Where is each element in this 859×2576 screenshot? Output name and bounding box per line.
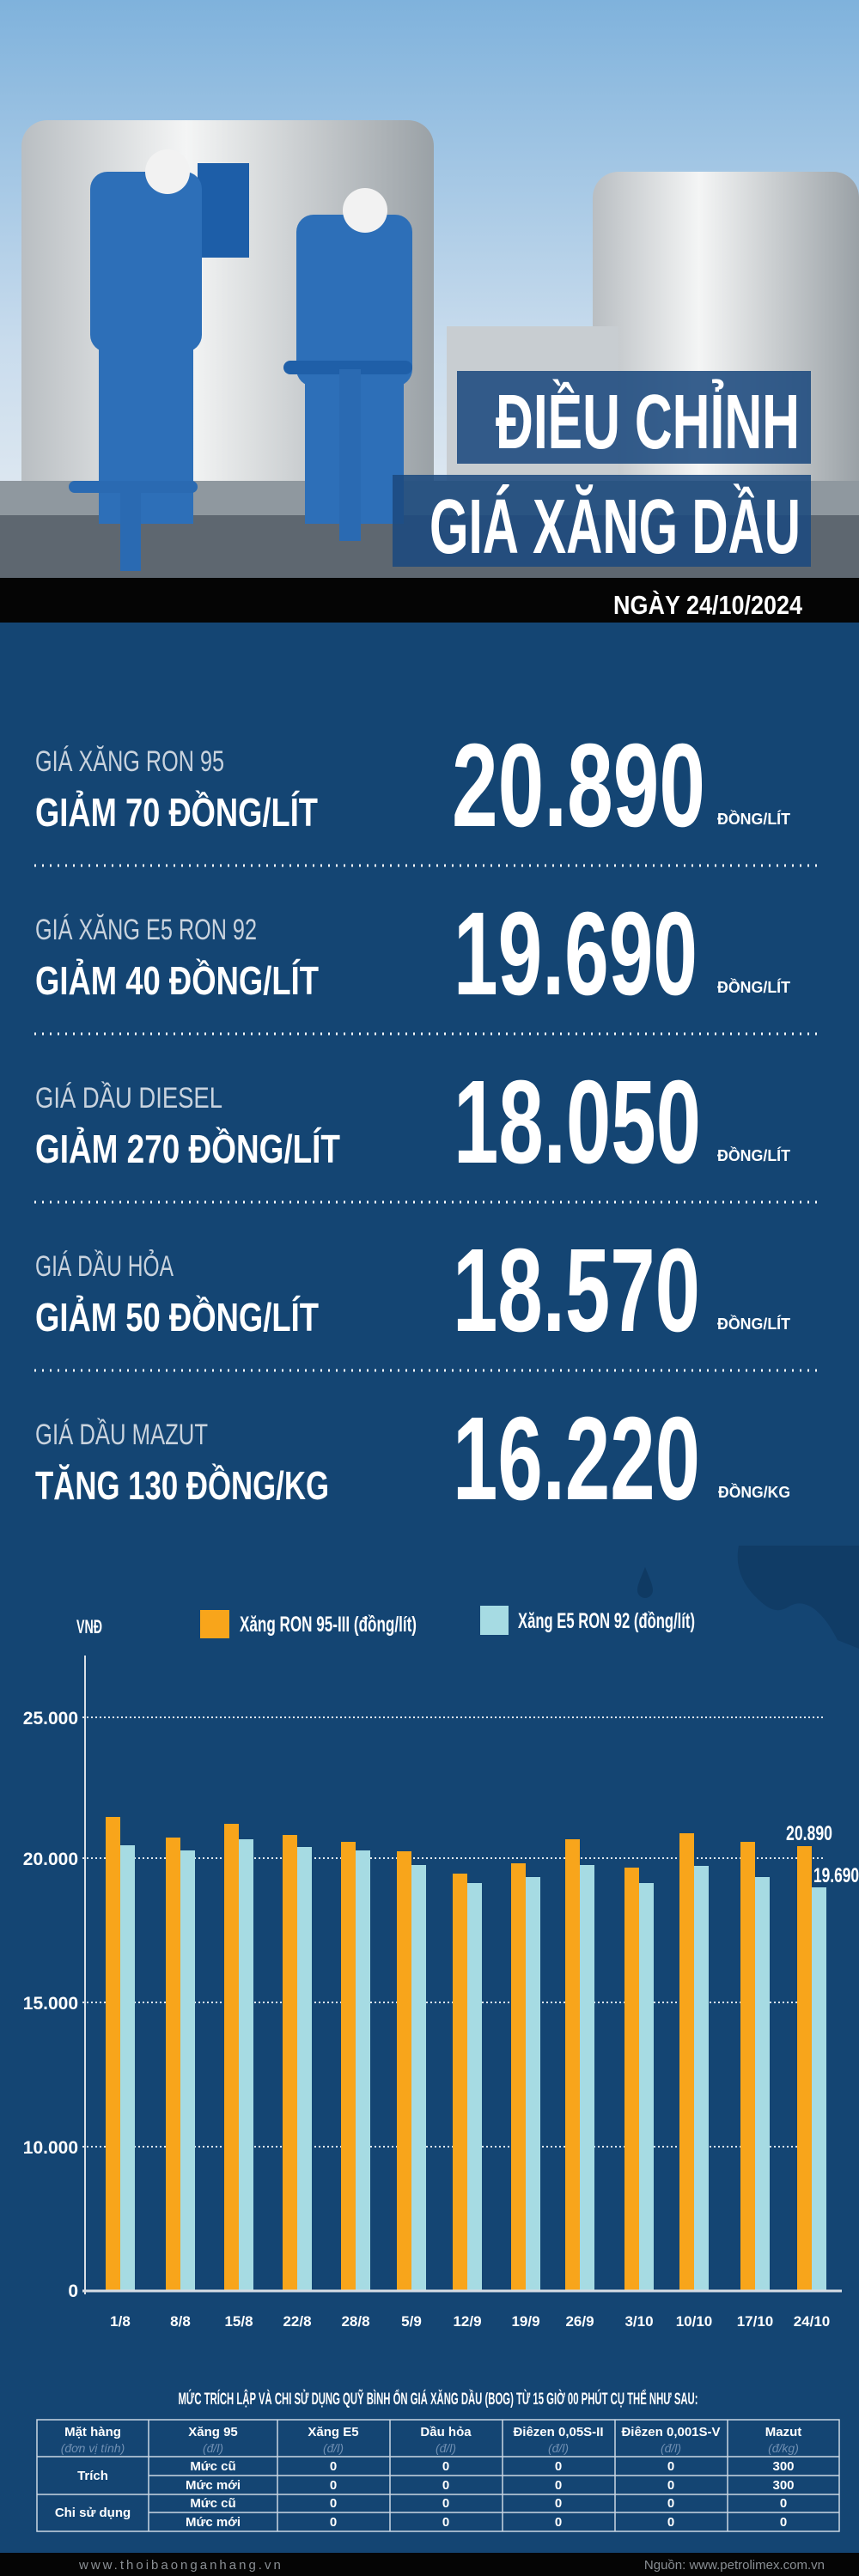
price row: Dầu hỏa: GIÁ DẦU HỎA bbox=[35, 1250, 174, 1283]
price row: E5 RON 92: 19.690 bbox=[454, 888, 698, 1020]
chart legend: Xăng RON 95-III (đồng/lít) bbox=[240, 1613, 417, 1637]
table: BOG fund: (đ/l) bbox=[436, 2441, 456, 2455]
bar chart: 17/10 bbox=[737, 2313, 773, 2330]
table: BOG fund: 0 bbox=[555, 2478, 562, 2493]
bar chart: 15/8 bbox=[224, 2313, 253, 2330]
table: BOG fund: 0 bbox=[555, 2515, 562, 2530]
table: BOG fund: 0 bbox=[667, 2459, 674, 2474]
bar chart: 10/10 bbox=[676, 2313, 712, 2330]
bar chart: 10.000 bbox=[23, 2138, 78, 2158]
table: BOG fund: 0 bbox=[442, 2478, 449, 2493]
footer: Nguồn: www.petrolimex.com.vn bbox=[644, 2558, 825, 2573]
price row: RON 95: GIẢM 70 ĐỒNG/LÍT bbox=[35, 790, 318, 835]
bar chart: 19/9 bbox=[511, 2313, 540, 2330]
bar chart: 26/9 bbox=[565, 2313, 594, 2330]
table: BOG fund: (đ/l) bbox=[323, 2441, 344, 2455]
table: BOG fund: (đ/l) bbox=[203, 2441, 223, 2455]
table: BOG fund: 0 bbox=[667, 2496, 674, 2511]
bar chart: 15.000 bbox=[23, 1994, 78, 2014]
chart legend: VNĐ bbox=[76, 1616, 102, 1637]
footer: www.thoibaonganhang.vn bbox=[78, 2558, 283, 2573]
price row: Dầu hỏa: 18.570 bbox=[453, 1224, 700, 1357]
table: BOG fund: Dầu hỏa bbox=[420, 2425, 472, 2439]
icon: oil drop and nozzle bbox=[637, 1546, 859, 1649]
table: BOG fund: 0 bbox=[667, 2478, 674, 2493]
price row: Diesel: GIẢM 270 ĐỒNG/LÍT bbox=[35, 1127, 340, 1171]
bar chart: 22/8 bbox=[283, 2313, 312, 2330]
table: BOG fund: Xăng 95 bbox=[188, 2425, 238, 2439]
table: BOG fund: 0 bbox=[780, 2515, 787, 2530]
table: BOG fund: 0 bbox=[330, 2496, 337, 2511]
table: BOG fund: 0 bbox=[442, 2459, 449, 2474]
price row: Diesel: ĐỒNG/LÍT bbox=[717, 1146, 790, 1164]
table: BOG fund: 0 bbox=[330, 2515, 337, 2530]
price row: E5 RON 92: ĐỒNG/LÍT bbox=[717, 978, 790, 996]
bar chart: 1/8 bbox=[110, 2313, 131, 2330]
price row: RON 95 bbox=[35, 720, 790, 852]
price row: Dầu hỏa: ĐỒNG/LÍT bbox=[717, 1315, 790, 1333]
table: BOG fund: Mazut bbox=[765, 2425, 801, 2439]
table: BOG fund: Chi sử dụng bbox=[55, 2506, 131, 2520]
table: BOG fund: Trích bbox=[77, 2469, 108, 2483]
chart legend bbox=[76, 1606, 695, 1638]
price row: RON 95: GIÁ XĂNG RON 95 bbox=[35, 745, 224, 778]
bar chart: 20.000 bbox=[23, 1850, 78, 1869]
chart legend: Xăng E5 RON 92 (đồng/lít) bbox=[518, 1609, 695, 1633]
price row: Mazut: GIÁ DẦU MAZUT bbox=[35, 1419, 208, 1451]
bar chart: 3/10 bbox=[624, 2313, 654, 2330]
bar chart: 5/9 bbox=[401, 2313, 422, 2330]
price row: RON 95: 20.890 bbox=[452, 720, 705, 852]
bar chart bbox=[23, 1656, 859, 2330]
table: BOG fund: Mức cũ bbox=[190, 2459, 236, 2474]
table: BOG fund: (đ/kg) bbox=[768, 2441, 799, 2455]
table: BOG fund: Mức mới bbox=[186, 2478, 241, 2493]
bar chart: 0 bbox=[68, 2281, 78, 2301]
price row: RON 95: ĐỒNG/LÍT bbox=[717, 810, 790, 828]
price row: Mazut: 16.220 bbox=[453, 1393, 700, 1525]
price row: E5 RON 92 bbox=[35, 888, 790, 1020]
price row: Dầu hỏa: GIẢM 50 ĐỒNG/LÍT bbox=[35, 1295, 319, 1340]
price row: Mazut: TĂNG 130 ĐỒNG/KG bbox=[35, 1463, 329, 1508]
table: BOG fund: 0 bbox=[555, 2459, 562, 2474]
header photo bbox=[0, 0, 859, 578]
table: BOG fund: 0 bbox=[780, 2496, 787, 2511]
table: BOG fund: (đơn vị tính) bbox=[61, 2441, 125, 2455]
bar chart: 12/9 bbox=[453, 2313, 482, 2330]
table: BOG fund: 300 bbox=[772, 2459, 795, 2474]
price row: E5 RON 92: GIẢM 40 ĐỒNG/LÍT bbox=[35, 958, 319, 1003]
bar chart: 20.890 bbox=[786, 1822, 832, 1845]
table: BOG fund: Xăng E5 bbox=[308, 2425, 359, 2439]
price row: Mazut: ĐỒNG/KG bbox=[718, 1483, 790, 1501]
bar chart: 8/8 bbox=[170, 2313, 191, 2330]
table: BOG fund: 0 bbox=[555, 2496, 562, 2511]
table: BOG fund: 300 bbox=[772, 2478, 795, 2493]
table: BOG fund: (đ/l) bbox=[548, 2441, 569, 2455]
date band bbox=[0, 578, 859, 623]
table: BOG fund: 0 bbox=[330, 2478, 337, 2493]
table: BOG fund: Điêzen 0,001S-V bbox=[621, 2425, 721, 2439]
date band: NGÀY 24/10/2024 bbox=[613, 590, 803, 620]
table: BOG fund: 0 bbox=[442, 2515, 449, 2530]
price row: Diesel bbox=[35, 1056, 790, 1188]
table: BOG fund: 0 bbox=[442, 2496, 449, 2511]
bar chart: 24/10 bbox=[794, 2313, 830, 2330]
bar chart: 28/8 bbox=[341, 2313, 370, 2330]
price row: E5 RON 92: GIÁ XĂNG E5 RON 92 bbox=[35, 914, 257, 946]
price row: Dầu hỏa bbox=[35, 1224, 790, 1357]
table: BOG fund: 0 bbox=[330, 2459, 337, 2474]
price row: Diesel: GIÁ DẦU DIESEL bbox=[35, 1082, 222, 1115]
table: BOG fund: Điêzen 0,05S-II bbox=[513, 2425, 604, 2439]
bar chart: 25.000 bbox=[23, 1709, 78, 1728]
table: BOG fund: 0 bbox=[667, 2515, 674, 2530]
table: BOG fund: (đ/l) bbox=[661, 2441, 681, 2455]
table: BOG fund: Mặt hàng bbox=[64, 2425, 121, 2439]
table: BOG fund: Mức mới bbox=[186, 2515, 241, 2530]
table: BOG fund bbox=[37, 2420, 839, 2531]
table: BOG fund: Mức cũ bbox=[190, 2496, 236, 2511]
footer bbox=[0, 2553, 859, 2576]
price row: Diesel: 18.050 bbox=[454, 1056, 701, 1188]
price row: Mazut bbox=[35, 1393, 790, 1525]
